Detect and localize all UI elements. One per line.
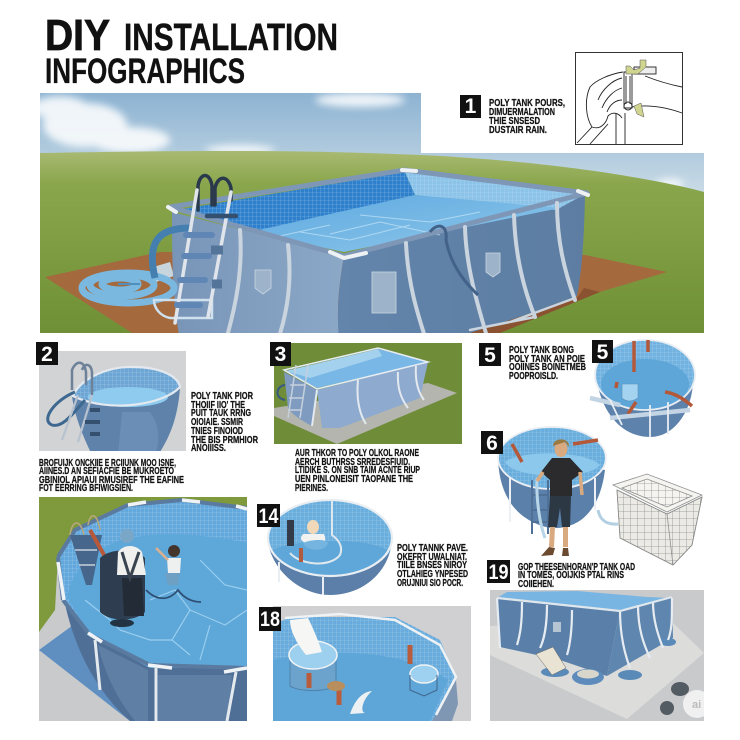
step 14 text: OTLAHIEG YNPESED	[397, 569, 468, 580]
lattice basket	[613, 474, 702, 565]
badge 18: 18	[260, 608, 280, 631]
lawn	[40, 151, 704, 333]
badge 2: 2	[41, 343, 53, 366]
step 1 text: THIE SNSESD	[489, 116, 540, 127]
step 2 side text: OIOIAIE. SSMIR	[191, 417, 243, 428]
frame legs	[226, 203, 575, 340]
step 3 text: LTIDIKE S. ON SNB TAIM ACNTE RIUP	[295, 465, 420, 476]
step 2 side text: TNIES FINOIOD	[191, 426, 243, 437]
rim	[170, 170, 587, 256]
step 19 text	[518, 562, 635, 590]
step 3 text: PIERINES.	[295, 483, 328, 494]
step 3 text: AUR THKOR TO POLY OLKOL RAONE	[295, 448, 419, 459]
step 19 text: GOP THEESENHORAN'P TANK OAD	[518, 562, 635, 573]
step 3 text	[295, 448, 420, 494]
badge 19: 19	[488, 561, 508, 584]
outer pipes	[590, 398, 690, 418]
fin	[350, 691, 372, 714]
step 14 text: OKEFRT UWALNIAT.	[397, 552, 467, 563]
white glove	[290, 618, 322, 655]
badge 5 text side	[479, 343, 501, 367]
labels on pool	[255, 253, 500, 313]
shadow under tank	[110, 619, 134, 627]
badge 5 pool side: 5	[597, 341, 609, 364]
step 5 text: POLY TANK AN POIE	[509, 354, 585, 365]
caustics	[85, 560, 247, 660]
water	[88, 387, 168, 407]
orange arrows	[512, 440, 598, 462]
panel: step 19 image	[490, 590, 711, 721]
sky	[40, 93, 704, 193]
pool water	[286, 349, 428, 388]
frame legs	[312, 366, 424, 426]
title: INFOGRAPHICS	[45, 52, 245, 91]
panel: step 18 image	[273, 606, 471, 721]
frame legs	[497, 597, 672, 668]
worker	[120, 529, 134, 543]
ladder	[62, 363, 100, 442]
watermark	[683, 690, 711, 718]
panel: step 19 image: ai	[692, 699, 701, 711]
step 2 lower text: BROFUIJK ONCKIIE E RCIIUNK MOO ISNE,	[39, 458, 176, 469]
step 1 text: DUSTAIR RAIN.	[489, 125, 547, 136]
badge 14: 14	[258, 505, 279, 528]
step 3 text: UEN PINLONEISIT TAOPANE THE	[295, 474, 413, 485]
pool left face	[172, 212, 344, 340]
step 2 side text: THOIIF IIO' THE	[191, 400, 245, 411]
badge 3: 3	[275, 343, 286, 366]
grass	[39, 497, 247, 632]
step 19 text: IN TOMES, OOIJKIS PTAL RINS	[518, 570, 624, 581]
inner filter	[622, 384, 638, 401]
ladder	[70, 516, 102, 585]
step 2 lower text: FOT EERRING BFIWIGSIEN.	[39, 483, 133, 494]
step 5 text	[509, 345, 586, 382]
tile wall	[60, 500, 247, 668]
badge 5 pool side	[592, 340, 613, 364]
panel: worker inside pool	[39, 497, 247, 721]
step 2 lower text: GBINIOL APIAUI RMUSIREF THE EAFINE	[39, 475, 184, 486]
step 5 text: OOIINES BOINETMEB	[509, 362, 586, 373]
badge 6	[481, 431, 503, 455]
step 1 text	[489, 98, 565, 136]
badge 6: 6	[486, 432, 498, 455]
orange arrows	[616, 340, 692, 414]
outer wall	[432, 680, 458, 721]
valve head	[327, 681, 345, 691]
step 2 side text: PUIT TAUK RRNG	[191, 408, 251, 419]
pool back walls	[176, 172, 415, 232]
ladder	[288, 365, 308, 418]
panel: step 3 image	[274, 343, 462, 444]
orange hose	[90, 530, 108, 562]
orange pipes	[309, 645, 410, 705]
ground mat	[490, 623, 704, 719]
step 19 text: COIIEHEN.	[518, 579, 554, 590]
step 5 text: POLY TANK BONG	[509, 345, 574, 356]
panel: step 5 exploded pool	[590, 340, 695, 437]
brown mat	[45, 252, 667, 333]
skimmer box	[553, 622, 561, 632]
step 2 side text	[191, 391, 258, 454]
ladder	[154, 176, 236, 323]
step 2 lower text: AIINES.D AN SEFIACFIE BE MUKROETO	[39, 466, 174, 477]
light pad under hose	[155, 262, 173, 282]
shadow under pool	[470, 288, 600, 333]
step 3 text: AERCH BUTHRSS SRREDESFIUID.	[295, 457, 410, 468]
round cushion	[572, 669, 604, 685]
skimmer hose on wall	[430, 226, 478, 295]
hose in water	[146, 590, 201, 602]
white board	[536, 647, 566, 675]
badge 2	[36, 342, 58, 366]
rim	[58, 500, 247, 668]
step 2 side text: POLY TANK PIOR	[191, 391, 253, 402]
pool faces	[497, 598, 620, 676]
water	[67, 534, 247, 668]
pump parts	[660, 682, 689, 715]
pool inner wall	[74, 368, 179, 402]
vertical hose	[152, 228, 190, 278]
step 1 line-art: hands fitting a valve	[576, 52, 682, 144]
step 1 badge: 1	[465, 95, 477, 118]
step 2 side text: ANOIIISS.	[191, 443, 226, 454]
step 1 badge	[460, 95, 481, 118]
panel: step 6 pool and person	[498, 427, 702, 565]
white hose on ladder	[537, 478, 545, 538]
step 1 text: DIMUERMALATION	[489, 107, 555, 118]
badge 5 text side: 5	[484, 344, 496, 367]
ladder	[532, 480, 548, 534]
hero image: rectangular pool on lawn	[32, 93, 704, 350]
step 14 text: POLY TANNK PAVE.	[397, 543, 468, 554]
pool right face	[338, 196, 585, 333]
round pool body	[72, 387, 180, 455]
dark tank	[100, 550, 145, 620]
panel: step 14 pool	[268, 500, 392, 595]
connecting hose	[598, 510, 618, 524]
pool faces	[284, 372, 317, 426]
hose	[48, 392, 85, 425]
outer wall	[66, 606, 247, 721]
title	[45, 11, 338, 91]
water	[250, 195, 560, 252]
rim	[285, 614, 456, 715]
inner tube left	[290, 655, 336, 690]
clouds	[32, 93, 684, 189]
blue splashes at base	[541, 638, 676, 680]
blue mat	[39, 626, 130, 721]
child	[168, 545, 180, 557]
person in inner ring	[307, 520, 319, 534]
title: INSTALLATION	[124, 17, 338, 59]
step 14 text	[397, 543, 468, 589]
step 1 text: POLY TANK POURS,	[489, 98, 565, 109]
grey mat	[274, 383, 457, 444]
tile wall	[273, 617, 455, 721]
step 14 text: ORUJNIUI SIO POCR.	[397, 578, 463, 589]
pool water	[497, 591, 672, 610]
step 2 side text: THE BIS PRMHIOR	[191, 435, 258, 446]
person	[537, 439, 583, 556]
water	[273, 653, 448, 721]
right tube	[410, 665, 438, 683]
badge 3	[270, 342, 291, 366]
vertical frame	[95, 640, 236, 721]
panel: step 2 image	[39, 351, 186, 455]
step 5 text: POOPROISLD.	[509, 371, 558, 382]
step 2 lower text	[39, 458, 184, 494]
title: DIY	[45, 11, 110, 60]
rim	[73, 367, 180, 406]
coiled hose	[82, 273, 174, 303]
step 14 text: TIILE BNSES NIROY	[397, 560, 467, 571]
